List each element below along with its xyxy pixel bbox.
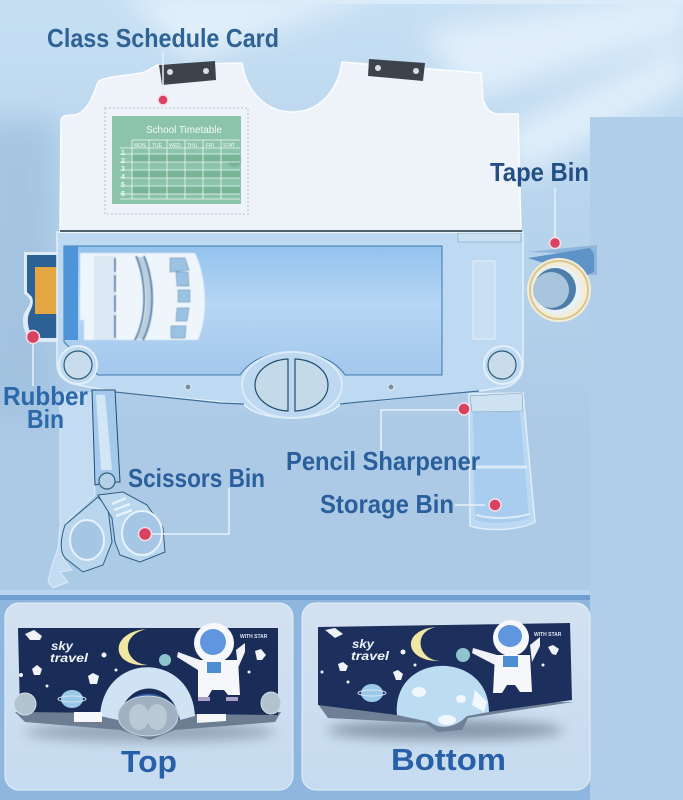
- tagline: WITH STAR: [534, 632, 562, 638]
- planets: [358, 648, 470, 702]
- label: tape bin: Tape Bin: [490, 157, 589, 187]
- school timetable: 2: [121, 158, 125, 165]
- inner tray: [64, 246, 442, 375]
- callout lines: [33, 52, 555, 534]
- strap: [48, 393, 95, 588]
- compartment dividers: [80, 253, 205, 340]
- callout markers: [26, 95, 560, 540]
- label: top: Top: [121, 744, 177, 779]
- label: rubber bin: Bin: [27, 404, 64, 434]
- white tabs: [74, 712, 226, 723]
- label: rubber bin: Rubber: [3, 381, 88, 411]
- label: sky travel: travel: [50, 651, 89, 665]
- label: scissors bin: Scissors Bin: [128, 463, 265, 493]
- label: class schedule card: Class Schedule Card: [47, 23, 279, 53]
- right clip: [368, 59, 425, 81]
- tagline: WITH STAR: [240, 634, 268, 640]
- astronaut: [177, 623, 245, 701]
- school timetable: MON: [134, 143, 146, 149]
- school timetable: 5: [121, 182, 125, 189]
- left hinge knob: [59, 346, 97, 384]
- right column label panel: [473, 261, 495, 339]
- stars and dots: [320, 628, 559, 684]
- label: sky travel: sky: [352, 637, 375, 651]
- label: sky travel: travel: [351, 649, 390, 663]
- scissors slot: [92, 390, 120, 485]
- corner knobs: [14, 692, 281, 715]
- icon: tape roll: [527, 258, 591, 322]
- panel: top view: [5, 603, 293, 790]
- clasp: [118, 696, 178, 736]
- label: sky travel: [50, 639, 89, 665]
- pencil case bottom: [318, 620, 573, 732]
- label: sky travel: sky: [51, 639, 74, 653]
- astronaut: [472, 620, 540, 693]
- label: storage bin: Storage Bin: [320, 489, 454, 519]
- label: pencil sharpener: Pencil Sharpener: [286, 446, 480, 476]
- school timetable: STAT: [223, 143, 235, 149]
- icon: orange eraser: [35, 267, 58, 314]
- storage bin: [469, 393, 535, 529]
- school timetable: TUE: [152, 143, 163, 149]
- moon: [411, 627, 440, 661]
- stars and dots: [19, 630, 266, 688]
- school timetable: School Timetable: [146, 125, 222, 136]
- centre clasp: [242, 352, 342, 418]
- planet dome: [397, 666, 489, 727]
- tape bin: [527, 245, 597, 322]
- pencil case top: [14, 623, 281, 740]
- school timetable: 6: [121, 191, 125, 198]
- label: sky travel: [351, 637, 390, 663]
- right hinge knob: [484, 346, 522, 384]
- school timetable: FRI: [206, 143, 214, 149]
- school timetable: THU: [187, 143, 198, 149]
- dome: [100, 667, 195, 720]
- scissors handles: [61, 473, 165, 572]
- panel: bottom view: [302, 603, 590, 790]
- school timetable: 3: [121, 166, 125, 173]
- planets: [58, 654, 171, 708]
- scissors bin: [48, 390, 165, 588]
- screws: [185, 384, 394, 390]
- pencil sharpener: [470, 393, 523, 412]
- label: bottom: Bottom: [391, 742, 506, 777]
- school timetable: 4: [121, 174, 125, 181]
- school timetable: WED: [169, 143, 181, 149]
- school timetable: [112, 116, 241, 204]
- pencil case body: [57, 232, 523, 418]
- class schedule card: [60, 59, 522, 232]
- moon: [119, 629, 148, 665]
- rubber bin: [23, 252, 58, 342]
- left clip: [159, 61, 216, 85]
- label: rubber bin: [3, 381, 88, 434]
- school timetable: 1: [121, 150, 125, 157]
